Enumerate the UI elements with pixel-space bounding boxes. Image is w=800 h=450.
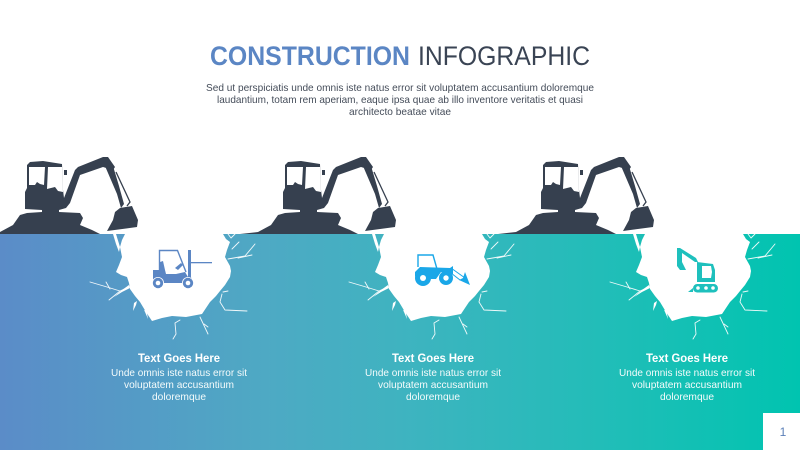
icon: forklift bbox=[152, 250, 212, 289]
subtitle text block: Sed ut perspiciatis unde omnis iste natus error sit voluptatem accusantium doloremque bbox=[206, 82, 594, 94]
text block 1 bbox=[111, 353, 247, 403]
text block 3: Text Goes Here bbox=[646, 353, 728, 365]
subtitle text block bbox=[206, 82, 594, 118]
icon: mini excavator bbox=[677, 248, 718, 292]
subtitle text block: architecto beatae vitae bbox=[349, 106, 451, 118]
text block 1: doloremque bbox=[152, 391, 206, 403]
excavator silhouette 1 bbox=[0, 157, 138, 234]
hole with cracks 1 bbox=[90, 234, 255, 339]
excavator silhouette 2 bbox=[240, 157, 396, 234]
page number badge: 1 bbox=[780, 425, 787, 439]
text block 2: Unde omnis iste natus error sit bbox=[365, 367, 501, 379]
page number badge bbox=[763, 413, 800, 450]
title: INFOGRAPHIC bbox=[418, 41, 590, 71]
text block 3 bbox=[619, 353, 755, 403]
text block 2 bbox=[365, 353, 501, 403]
text block 2: doloremque bbox=[406, 391, 460, 403]
text block 1: Unde omnis iste natus error sit bbox=[111, 367, 247, 379]
text block 3: Unde omnis iste natus error sit bbox=[619, 367, 755, 379]
hole with cracks 3 bbox=[610, 234, 775, 339]
subtitle text block: laudantium, totam rem aperiam, eaque ipsa quae ab illo inventore veritatis et quasi bbox=[217, 94, 583, 106]
title: CONSTRUCTION bbox=[210, 41, 410, 71]
gradient ground panel bbox=[0, 234, 800, 450]
title bbox=[210, 41, 590, 71]
text block 2: voluptatem accusantium bbox=[378, 379, 488, 391]
text block 2: Text Goes Here bbox=[392, 353, 474, 365]
excavator silhouette 3 bbox=[498, 157, 654, 234]
text block 3: voluptatem accusantium bbox=[632, 379, 742, 391]
icon: bulldozer bbox=[415, 255, 470, 286]
text block 1: voluptatem accusantium bbox=[124, 379, 234, 391]
text block 1: Text Goes Here bbox=[138, 353, 220, 365]
text block 3: doloremque bbox=[660, 391, 714, 403]
hole with cracks 2 bbox=[349, 234, 514, 339]
